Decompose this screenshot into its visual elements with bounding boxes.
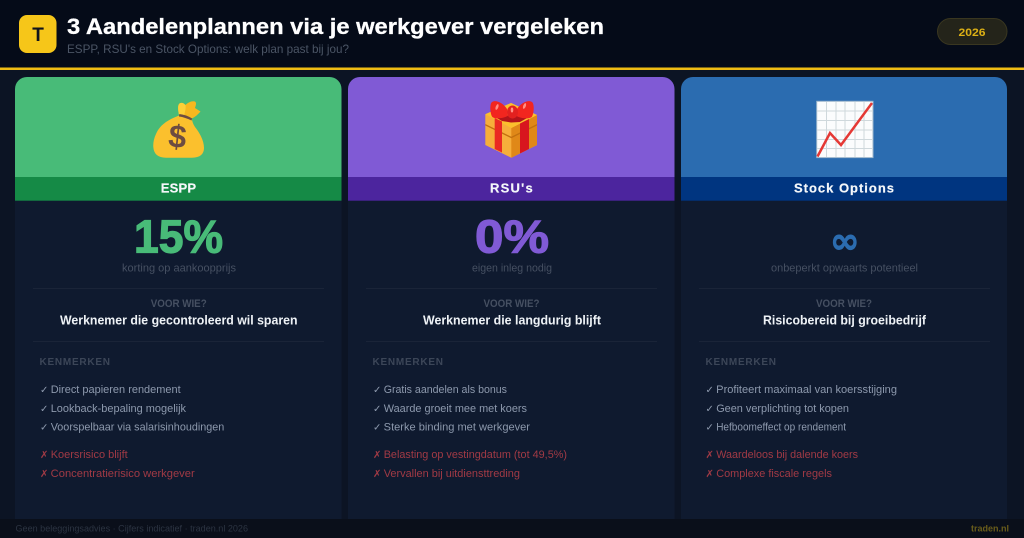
pros list: [373, 384, 530, 433]
logo badge: T: [32, 25, 44, 46]
pros list: ✓: [373, 422, 381, 433]
for whom: Werknemer die gecontroleerd wil sparen: [60, 312, 298, 328]
band: Stock Options: Stock Options: [794, 181, 894, 196]
band: ESPP: [15, 177, 342, 201]
pros list: ✓: [706, 385, 714, 396]
features heading: KENMERKEN: [372, 357, 443, 368]
band: RSU's: RSU's: [490, 181, 533, 196]
cons list: Belasting op vestingdatum (tot 49,5%): [384, 449, 567, 461]
header accent line: [0, 68, 1024, 70]
pros list: ✓: [373, 385, 381, 396]
pros list: ✓: [706, 422, 714, 433]
for whom: VOOR WIE?: [484, 298, 540, 310]
pros list: Waarde groeit mee met koers: [384, 403, 527, 415]
icon: money bag: [153, 101, 204, 158]
pros list: ✓: [40, 385, 48, 396]
caption: korting op aankoopprijs: [122, 262, 236, 274]
pros list: Profiteert maximaal van koersstijging: [716, 384, 897, 396]
cons list: ✗: [373, 469, 381, 480]
big number: 0%: 0%: [475, 211, 549, 263]
for whom: Werknemer die langdurig blijft: [423, 312, 602, 328]
cons list: ✗: [373, 450, 381, 461]
big symbol: infinity: ∞: [830, 221, 860, 262]
brand: traden.nl: [971, 524, 1009, 535]
cons list: [40, 449, 195, 480]
cons list: [373, 449, 567, 480]
cons list: ✗: [40, 450, 48, 461]
pros list: Sterke binding met werkgever: [384, 421, 530, 433]
panel: Stock Options: [681, 77, 1007, 519]
cons list: Koersrisico blijft: [51, 449, 128, 461]
header bar: [0, 0, 1024, 68]
cons list: ✗: [706, 450, 714, 461]
pros list: Geen verplichting tot kopen: [716, 403, 849, 415]
big number: 15%: 15%: [134, 211, 223, 263]
caption: eigen inleg nodig: [472, 262, 552, 274]
pros list: ✓: [40, 404, 48, 415]
pros list: [706, 384, 897, 433]
for whom: VOOR WIE?: [816, 298, 872, 310]
for whom: Risicobereid bij groeibedrijf: [763, 312, 927, 328]
pros list: ✓: [706, 404, 714, 415]
for whom: [60, 298, 298, 328]
icon: rising chart: [817, 101, 873, 158]
cons list: Complexe fiscale regels: [716, 468, 832, 480]
band: Stock Options: [681, 177, 1007, 201]
title: 3 Aandelenplannen via je werkgever vergeleken: [67, 14, 604, 39]
year badge: [938, 18, 1007, 44]
pros list: Voorspelbaar via salarisinhoudingen: [51, 421, 224, 433]
icon: money bag: $: [167, 118, 188, 155]
disclaimer: Geen beleggingsadvies · Cijfers indicatief · traden.nl 2026: [16, 524, 248, 535]
icon: gift box: [485, 101, 537, 158]
cons list: ✗: [706, 469, 714, 480]
features heading: KENMERKEN: [40, 357, 110, 368]
band: ESPP: ESPP: [161, 181, 196, 196]
pros list: Hefboomeffect op rendement: [716, 421, 846, 433]
cons list: [706, 449, 858, 480]
pros list: Direct papieren rendement: [51, 384, 181, 396]
pros list: ✓: [40, 422, 48, 433]
for whom: [763, 298, 927, 328]
features heading: KENMERKEN: [706, 357, 776, 368]
cons list: Waardeloos bij dalende koers: [716, 449, 858, 461]
panel: RSU's: [348, 77, 674, 519]
panel: ESPP: [15, 77, 342, 519]
for whom: VOOR WIE?: [151, 298, 207, 310]
pros list: [40, 384, 224, 433]
cons list: Vervallen bij uitdiensttreding: [384, 468, 520, 480]
year badge: 2026: [958, 27, 986, 39]
pros list: ✓: [373, 404, 381, 415]
band: RSU's: [348, 177, 674, 201]
for whom: [423, 298, 602, 328]
pros list: Lookback-bepaling mogelijk: [51, 403, 186, 415]
cons list: ✗: [40, 469, 48, 480]
cons list: Concentratierisico werkgever: [51, 468, 195, 480]
pros list: Gratis aandelen als bonus: [384, 384, 507, 396]
footer: [0, 519, 1024, 538]
caption: onbeperkt opwaarts potentieel: [771, 262, 918, 274]
logo badge: [19, 15, 56, 53]
subtitle: ESPP, RSU's en Stock Options: welk plan past bij jou?: [67, 42, 349, 56]
